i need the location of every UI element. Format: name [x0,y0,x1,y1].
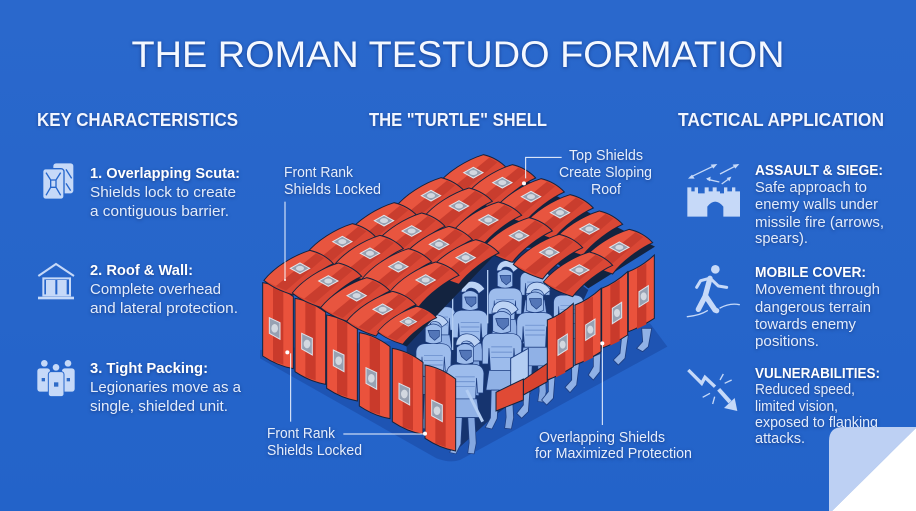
heading: key characteristics: KEY CHARACTERISTICS [37,110,238,130]
text block: mobile cover: dangerous terrain [755,300,871,316]
text block: assault and siege: enemy walls under [755,197,878,213]
text block: roof and wall [90,263,238,317]
panel: tactical application [678,110,884,447]
icon: castle under arrows [687,164,740,217]
text block: assault and siege: Safe approach to [755,180,867,196]
interior darkness [407,248,588,450]
text block: vulnerabilities: attacks. [755,431,805,447]
callout: top front rank: Shields Locked [284,182,381,198]
callout: top shields: Create Sloping [559,165,652,181]
text block: assault and siege [755,163,884,247]
right wall shields [547,255,654,380]
text block: vulnerabilities [755,366,880,447]
callout: top shields: Roof [591,182,622,198]
text block: vulnerabilities: exposed to flanking [755,415,878,431]
roof of shields [263,155,655,347]
text block: tight packing [90,361,242,415]
text block: overlapping scuta: a contiguous barrier. [90,204,229,220]
panel: key characteristics [37,110,242,415]
text block: overlapping scuta: 1. Overlapping Scuta: [90,166,240,182]
icon: roof and wall [38,264,74,299]
text block: mobile cover: MOBILE COVER: [755,265,866,281]
text block: overlapping scuta: Shields lock to create [90,185,236,201]
illustration: testudo formation [260,155,667,461]
heading: tactical application: TACTICAL APPLICATION [678,110,884,130]
text block: roof and wall: 2. Roof & Wall: [90,263,193,279]
text block: roof and wall: Complete overhead [90,282,221,298]
callout: top front rank [284,165,381,198]
legs below right wall [517,328,652,418]
callout: bottom front rank: Front Rank [267,426,336,442]
text block: assault and siege: missile fire (arrows, [755,215,884,231]
text block: assault and siege: spears). [755,231,808,247]
front wall shields [263,283,456,451]
leader lines [285,157,602,434]
text block: roof and wall: and lateral protection. [90,301,238,317]
text block: mobile cover: Movement through [755,282,880,298]
text block: mobile cover [755,265,880,350]
text block: tight packing: Legionaries move as a [90,380,242,396]
text block: overlapping scuta [90,166,240,220]
text block: tight packing: single, shielded unit. [90,399,228,415]
text block: vulnerabilities: limited vision, [755,399,838,415]
icon: tight packing [37,360,75,397]
callout: overlapping shields: for Maximized Protection [535,446,692,462]
heading: turtle shell: THE "TURTLE" SHELL [369,110,547,130]
callout: top shields [559,148,652,198]
text block: vulnerabilities: Reduced speed, [755,382,855,398]
text block: mobile cover: towards enemy [755,317,857,333]
text block: assault and siege: ASSAULT & SIEGE: [755,163,883,179]
callout: top shields: Top Shields [569,148,643,164]
page curl corner [829,427,916,511]
low front shields [496,363,547,411]
text block: mobile cover: positions. [755,334,819,350]
icon: broken arrow [688,370,737,411]
callout: overlapping shields: Overlapping Shields [539,430,665,446]
text block: vulnerabilities: VULNERABILITIES: [755,366,880,382]
leader dots [284,181,604,436]
callout: overlapping shields [535,430,692,462]
title: THE ROMAN TESTUDO FORMATION [132,34,784,75]
icon: overlapping shields [43,163,73,199]
callout: bottom front rank: Shields Locked [267,443,362,459]
icon: walking figure [687,265,739,317]
callout: top front rank: Front Rank [284,165,354,181]
text block: tight packing: 3. Tight Packing: [90,361,208,377]
ground shadow [260,323,667,461]
soldiers [416,247,584,454]
callout: bottom front rank [267,426,362,459]
